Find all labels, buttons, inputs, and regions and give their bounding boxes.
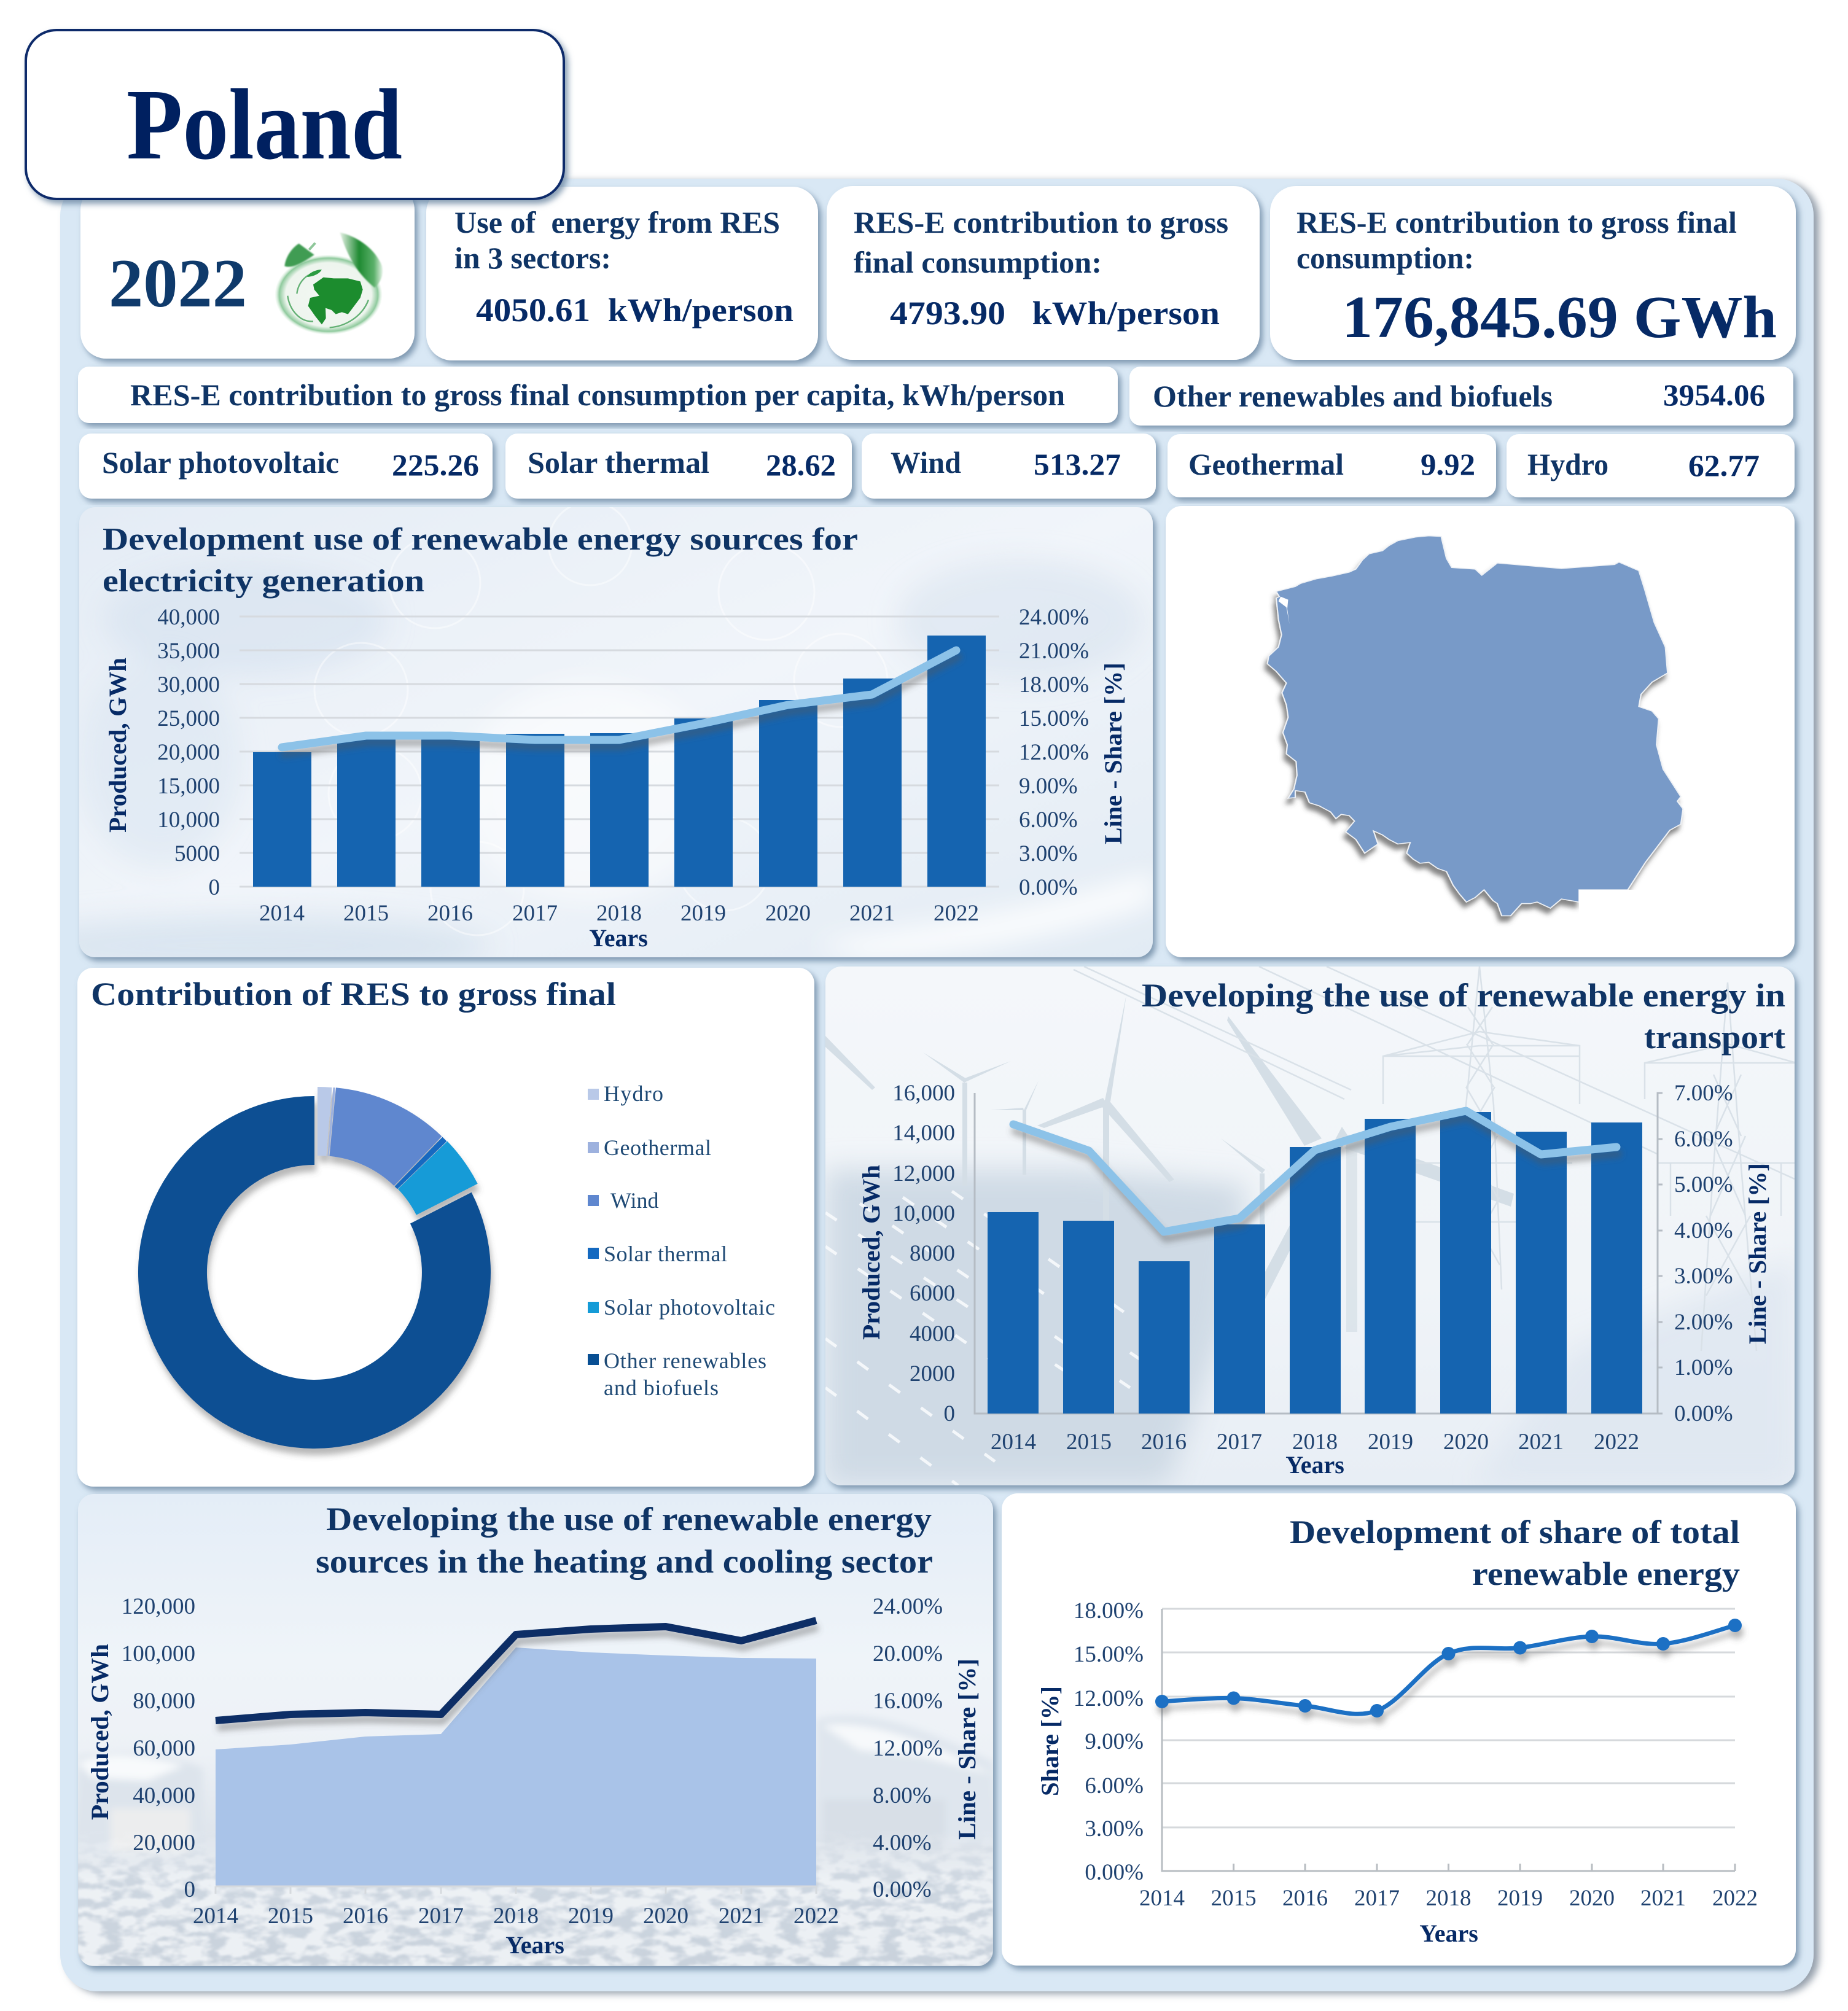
year labels: 2020 [643,1904,688,1929]
line: share [282,650,956,747]
y axis labels: 15.00% [1074,1642,1144,1667]
right axis labels: 24.00% [1019,605,1089,630]
left axis labels: 40,000 [157,605,220,630]
right axis labels: 16.00% [873,1689,943,1714]
year labels: 2017 [1354,1886,1400,1911]
left axis labels: 0 [943,1401,955,1426]
area chart: produced GWh [216,1647,816,1886]
y axis title right: Line - Share [%] [953,1659,981,1840]
stat: other renewables and biofuels [1129,367,1793,426]
left axis labels: 16,000 [892,1081,955,1106]
card: use of energy from RES [426,187,818,360]
legend: Solar photovoltaic [604,1295,775,1320]
stat: hydro: Hydro [1527,447,1608,481]
right axis labels: 3.00% [1674,1264,1733,1289]
right axis labels: 21.00% [1019,639,1089,664]
card: use of energy from RES: Use of energy from RES [454,205,780,239]
heading [1290,1514,1740,1592]
axes [975,1093,1663,1414]
card: RES-E total GWh: RES-E contribution to gross final [1296,205,1737,239]
right axis labels: 9.00% [1019,774,1078,799]
year labels: 2018 [493,1904,539,1929]
year labels: 2015 [268,1904,313,1929]
year labels: 2017 [418,1904,464,1929]
per capita heading [78,367,1118,423]
title card: Poland [26,30,564,199]
year labels [259,901,979,926]
x axis title: Years [1285,1451,1344,1479]
y axis labels [1074,1598,1144,1885]
bar chart: produced GWh [253,636,986,887]
stat: solar thermal: Solar thermal [528,445,709,480]
panel: electricity generation chart [0,502,1155,976]
right axis labels: 0.00% [1019,875,1078,900]
panel: contribution of RES donut [77,968,814,1487]
year labels: 2014 [259,901,305,926]
year labels: 2022 [793,1904,839,1929]
left axis labels: 30,000 [157,672,220,698]
card: RES-E per person: RES-E contribution to gross [854,205,1228,239]
year labels: 2016 [1282,1886,1328,1911]
heading: electricity generation [103,564,424,599]
year labels: 2020 [1443,1429,1489,1455]
y axis labels: 0.00% [1085,1860,1144,1885]
left axis labels [122,1594,195,1902]
heading [103,522,858,599]
donut chart [138,1087,491,1449]
left axis labels: 2000 [910,1361,955,1387]
right axis labels: 2.00% [1674,1310,1733,1335]
left axis labels: 0 [209,875,220,900]
stat: hydro [1507,434,1795,497]
left axis labels: 120,000 [122,1594,195,1619]
right axis labels: 0.00% [1674,1401,1733,1426]
y axis title left: Produced, GWh [857,1165,885,1340]
legend: and biofuels [604,1375,719,1400]
year labels: 2015 [1211,1886,1257,1911]
y axis title: Share [%] [1036,1686,1064,1796]
card: use of energy from RES: 4050.61 kWh/person [476,292,793,329]
right axis labels: 18.00% [1019,672,1089,698]
right axis labels: 8.00% [873,1783,932,1808]
stat: geothermal: 9.92 [1421,447,1475,481]
stat: solar photovoltaic: Solar photovoltaic [102,445,339,480]
y axis labels: 9.00% [1085,1729,1144,1754]
stat: geothermal: Geothermal [1188,447,1344,481]
year labels: 2020 [1569,1886,1615,1911]
heading: Contribution of RES to gross final [91,976,616,1013]
year labels: 2021 [719,1904,764,1929]
y axis labels: 3.00% [1085,1816,1144,1842]
year labels: 2019 [1497,1886,1543,1911]
year labels: 2018 [1292,1429,1338,1455]
year labels: 2015 [343,901,389,926]
heading: sources in the heating and cooling sector [316,1543,933,1580]
year labels [991,1429,1639,1455]
left axis labels: 80,000 [133,1689,195,1714]
year labels: 2014 [1139,1886,1185,1911]
year labels: 2018 [1426,1886,1472,1911]
legend [588,1081,775,1400]
heading: renewable energy [1472,1555,1740,1592]
year labels: 2019 [1368,1429,1413,1455]
right axis labels: 5.00% [1674,1172,1733,1197]
stat: geothermal [1168,434,1496,497]
left axis labels: 0 [184,1877,195,1902]
right axis labels: 24.00% [873,1594,943,1619]
card: RES-E per person: 4793.90 kWh/person [890,295,1220,332]
right axis labels [1019,605,1089,900]
card: use of energy from RES: in 3 sectors: [454,241,611,275]
right axis labels: 4.00% [873,1830,932,1856]
y axis labels: 12.00% [1074,1686,1144,1711]
y axis title left: Produced, GWh [104,658,131,833]
right axis labels: 4.00% [1674,1218,1733,1243]
axis [216,1886,816,1894]
map [1268,536,1683,916]
left axis labels: 5000 [174,841,220,866]
heading: Development use of renewable energy sources for [103,522,858,557]
right axis labels: 0.00% [873,1877,932,1902]
year labels: 2017 [1217,1429,1262,1455]
stat: solar photovoltaic: 225.26 [392,448,479,482]
legend: Geothermal [604,1135,711,1160]
right axis labels: 7.00% [1674,1081,1733,1106]
left axis labels: 12,000 [892,1161,955,1186]
y axis labels: 18.00% [1074,1598,1144,1624]
y axis title right: Line - Share [%] [1099,663,1127,844]
stat: other renewables and biofuels: Other renewables and biofuels [1153,379,1553,413]
left axis labels: 20,000 [157,740,220,765]
left axis labels [892,1081,955,1426]
year labels: 2016 [343,1904,388,1929]
heading: transport [1644,1019,1785,1056]
heading [1142,977,1785,1056]
gridlines [240,617,999,887]
line: share [216,1620,816,1721]
stat: wind [862,434,1156,499]
right axis labels: 1.00% [1674,1355,1733,1380]
left axis labels: 25,000 [157,706,220,731]
panel: transport chart [825,967,1796,1485]
right axis labels: 6.00% [1019,807,1078,833]
right axis labels [1674,1081,1733,1426]
year labels: 2019 [680,901,726,926]
icon: green globe and leaf [275,232,383,335]
left axis labels: 10,000 [892,1201,955,1226]
year labels: 2022 [1594,1429,1639,1455]
line with markers [1155,1619,1742,1717]
per capita heading: RES-E contribution to gross final consumption per capita, kWh/person [130,378,1065,412]
stat: solar photovoltaic [79,434,493,499]
x axis title: Years [1419,1920,1478,1947]
right axis labels: 15.00% [1019,706,1089,731]
year labels: 2018 [596,901,642,926]
heading: Development of share of total [1290,1514,1740,1550]
card: year 2022 [80,184,415,359]
heading: Developing the use of renewable energy [326,1501,932,1538]
stat: solar thermal [505,434,852,499]
legend: Other renewables [604,1348,766,1373]
left axis labels: 14,000 [892,1121,955,1146]
left axis labels: 20,000 [133,1830,195,1856]
gridlines [1162,1609,1735,1871]
panel: map of Poland [1166,506,1795,957]
heading [316,1501,933,1580]
heading: Developing the use of renewable energy in [1142,977,1785,1014]
stat: wind: Wind [891,445,961,480]
right axis labels: 6.00% [1674,1127,1733,1152]
left axis labels: 6000 [910,1281,955,1306]
title card: Poland: Poland [127,68,402,181]
legend: Wind [610,1188,659,1213]
year labels: 2014 [991,1429,1036,1455]
y axis title left: Produced, GWh [86,1644,114,1820]
panel: total share chart [1002,1493,1796,1966]
year labels: 2021 [1518,1429,1564,1455]
left axis labels: 4000 [910,1321,955,1347]
card: RES-E total GWh: consumption: [1296,241,1474,275]
left axis labels [157,605,220,900]
right axis labels: 20.00% [873,1641,943,1667]
stat: wind: 513.27 [1034,447,1121,481]
year labels: 2017 [512,901,558,926]
left axis labels: 100,000 [122,1641,195,1667]
y axis labels: 6.00% [1085,1773,1144,1799]
stat: other renewables and biofuels: 3954.06 [1663,378,1765,412]
year labels: 2022 [1712,1886,1758,1911]
year labels: 2022 [934,901,979,926]
card: RES-E per person [827,186,1260,360]
card: RES-E total GWh: 176,845.69 GWh [1342,284,1777,351]
right axis labels [873,1594,943,1902]
right axis labels: 12.00% [873,1736,943,1761]
line: share [1013,1111,1616,1232]
bar chart: produced GWh [988,1112,1642,1414]
legend: Solar thermal [604,1242,727,1266]
left axis labels: 40,000 [133,1783,195,1808]
stat: solar thermal: 28.62 [766,448,836,482]
left axis labels: 8000 [910,1241,955,1266]
year labels: 2021 [1640,1886,1686,1911]
panel: heating and cooling chart [78,1494,993,1966]
x axis title: Years [589,924,648,952]
year labels [193,1904,839,1929]
right axis labels: 3.00% [1019,841,1078,866]
x axis title: Years [505,1931,564,1959]
right axis labels: 12.00% [1019,740,1089,765]
left axis labels: 10,000 [157,807,220,833]
year labels: 2016 [1141,1429,1187,1455]
year labels: 2020 [765,901,811,926]
year: 2022 [109,246,247,322]
year labels: 2021 [849,901,895,926]
card: RES-E per person: final consumption: [854,245,1102,279]
left axis labels: 60,000 [133,1736,195,1761]
card: RES-E total GWh [1270,186,1796,360]
year labels: 2016 [427,901,473,926]
year labels: 2014 [193,1904,238,1929]
year labels: 2019 [568,1904,614,1929]
left axis labels: 35,000 [157,639,220,664]
left axis labels: 15,000 [157,774,220,799]
year labels [1139,1886,1758,1911]
stat: hydro: 62.77 [1688,448,1760,483]
year labels: 2015 [1066,1429,1112,1455]
legend: Hydro [604,1081,663,1106]
y axis title right: Line - Share [%] [1744,1163,1771,1344]
